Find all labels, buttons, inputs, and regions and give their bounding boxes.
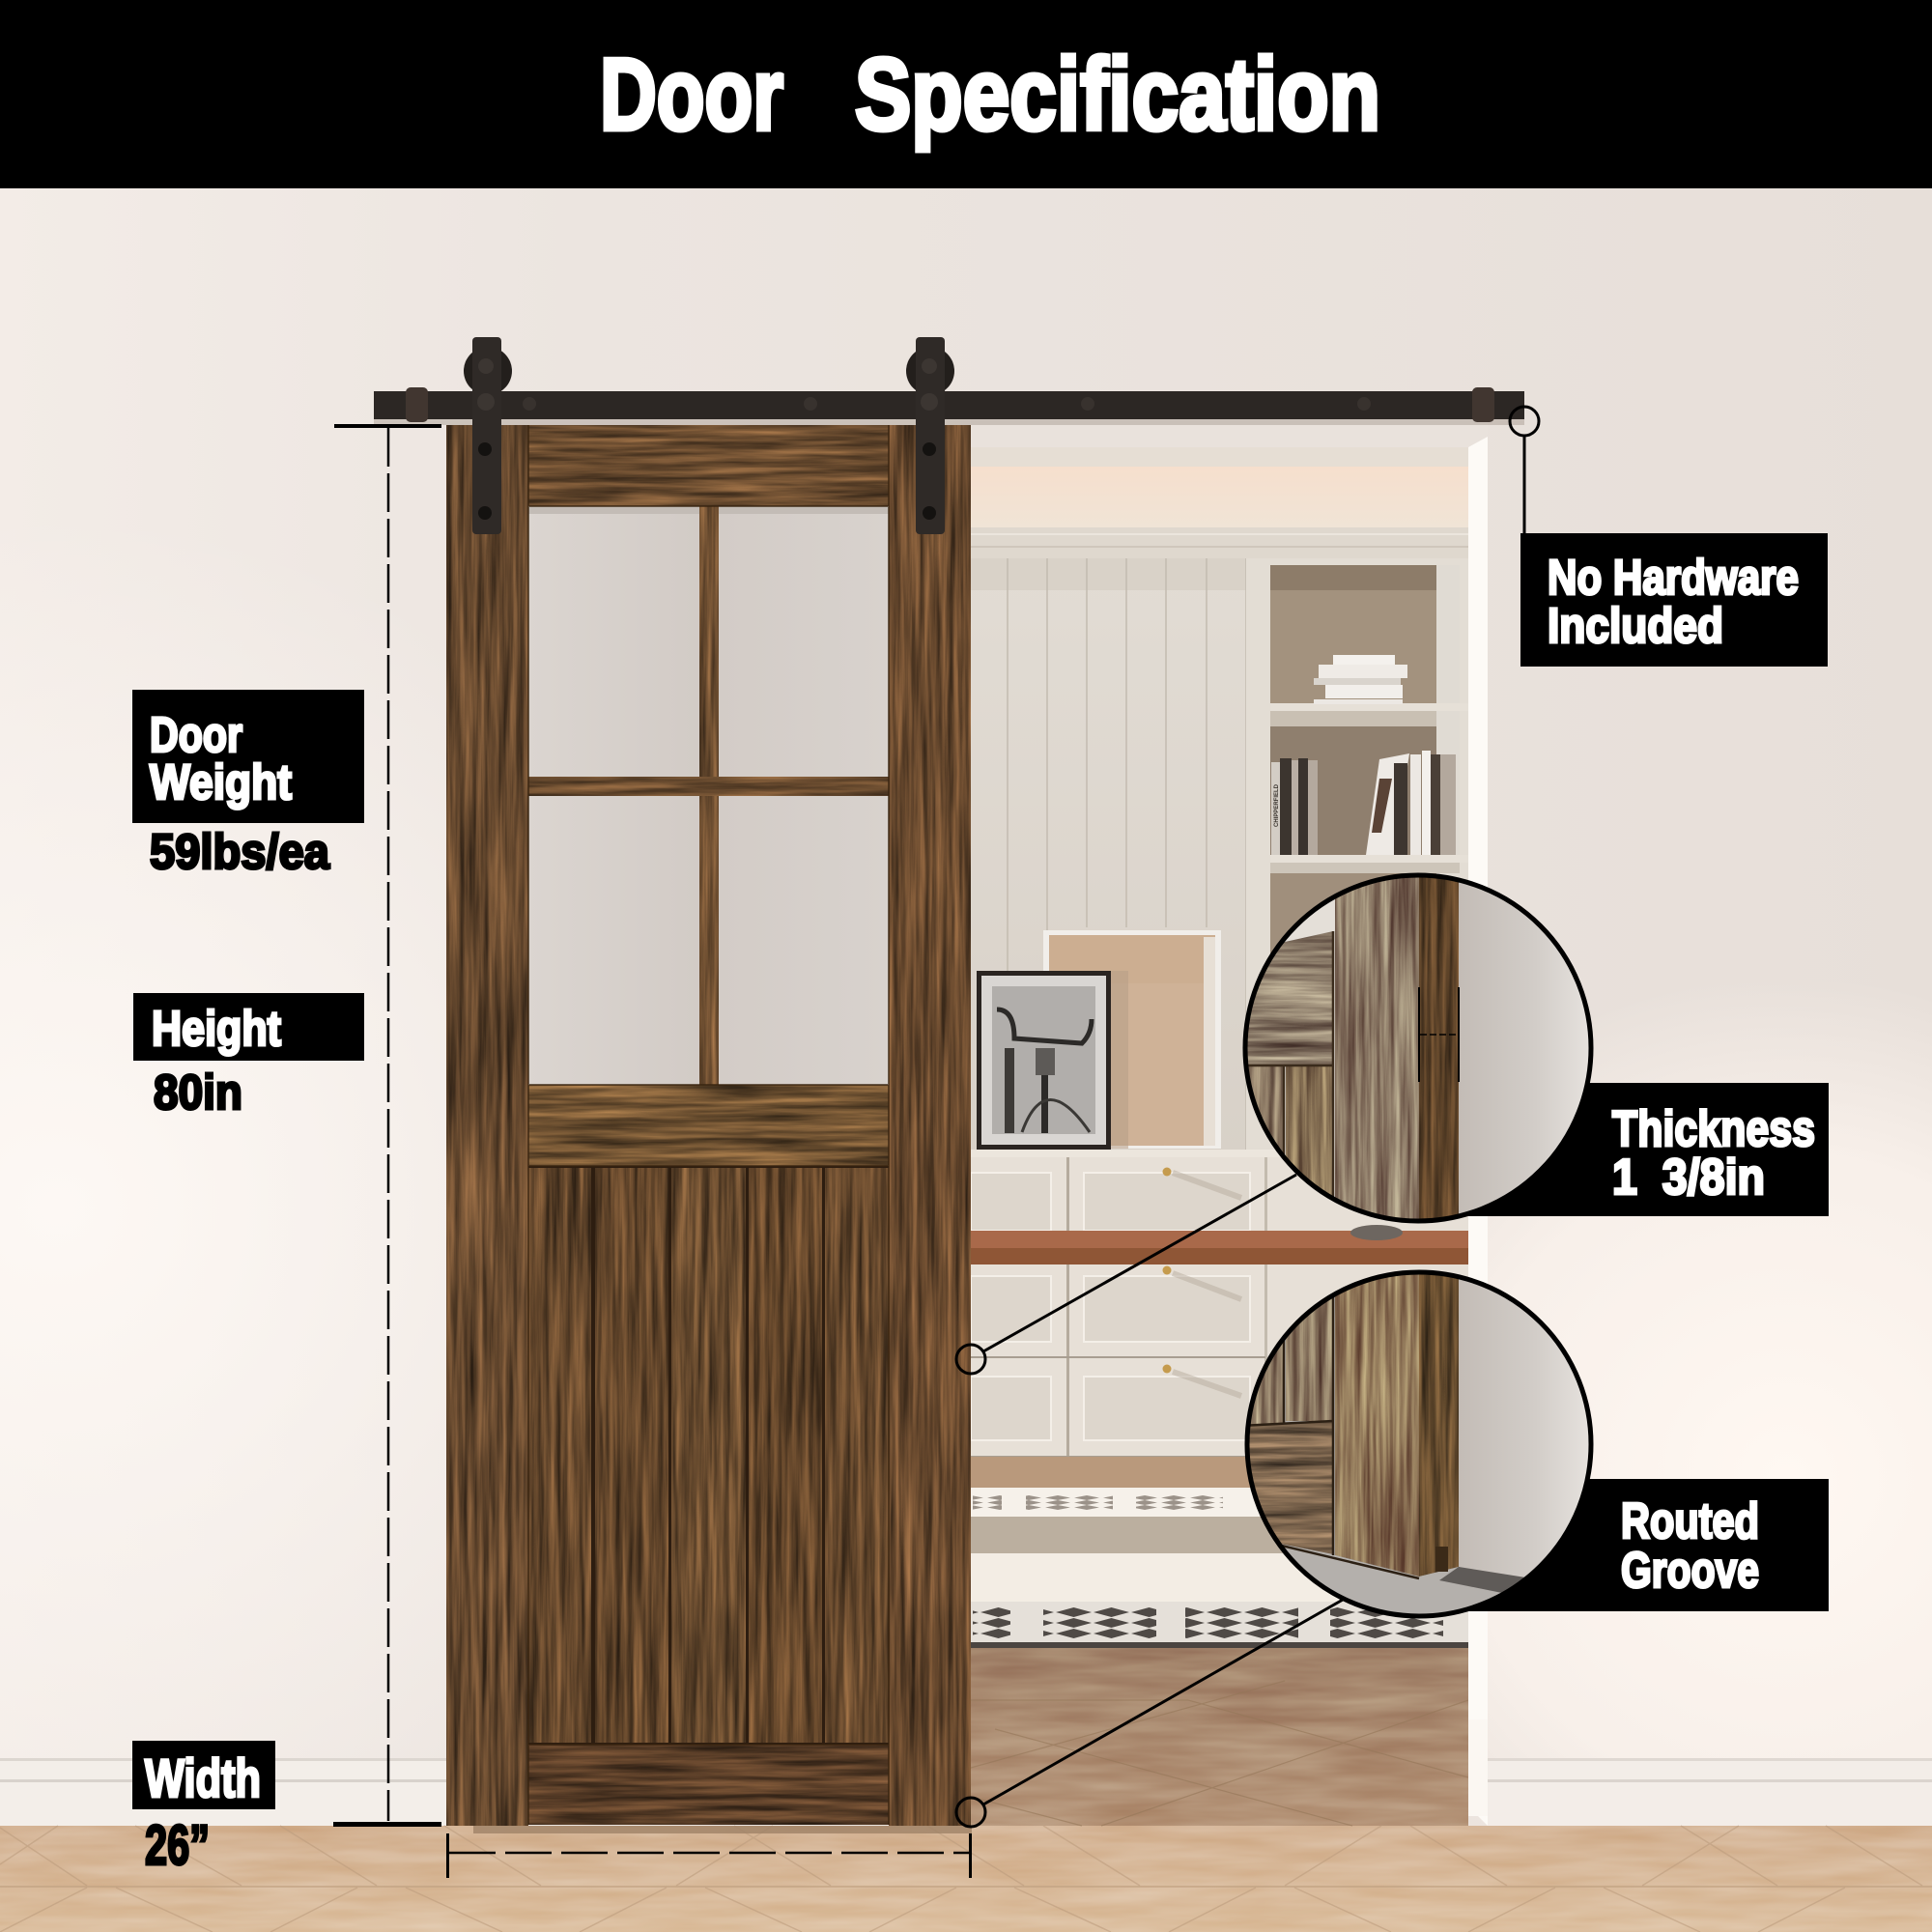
header bar	[0, 0, 1932, 188]
thickness marks	[1418, 987, 1460, 1082]
label: routed groove: Routed	[1621, 1493, 1759, 1549]
left stile	[446, 425, 528, 1826]
label: door weight: Door	[150, 707, 242, 762]
barn door	[446, 425, 971, 1826]
vertical muntin	[699, 506, 719, 1086]
label: thickness: Thickness	[1612, 1101, 1815, 1157]
height dimension line	[333, 424, 441, 1827]
value: height: 80in	[154, 1065, 242, 1120]
floor shadow under door	[473, 1826, 972, 1833]
detail circle: thickness	[1241, 869, 1599, 1231]
bookcase	[1246, 558, 1468, 1162]
door end	[1419, 869, 1459, 1227]
lower plank panels	[528, 1166, 889, 1745]
label: no hardware included: No Hardware	[1548, 550, 1799, 605]
rail face	[1241, 931, 1333, 1065]
stile face	[1335, 869, 1419, 1227]
detail circle: routed groove	[1241, 1265, 1599, 1623]
cabinet ledge	[971, 1150, 1468, 1159]
lower rail	[1250, 1422, 1332, 1554]
bottom rail	[528, 1745, 889, 1825]
left door hanger	[464, 337, 512, 534]
label: no hardware included: Included	[1548, 598, 1723, 653]
label: routed groove: Groove	[1621, 1543, 1759, 1599]
title: Specification	[855, 38, 1380, 152]
label: no hardware included	[1520, 533, 1828, 667]
upright books	[1271, 751, 1456, 855]
track spacer bolts	[523, 397, 1371, 411]
abstract art frame	[1043, 930, 1221, 1149]
rear floor and rug	[971, 1457, 1468, 1826]
upright books: CHIPPERFIELD	[1274, 783, 1280, 827]
middle rail	[528, 1085, 889, 1166]
label: door weight: Weight	[150, 754, 292, 810]
value: width: 26”	[145, 1814, 210, 1877]
doorway casing	[1468, 437, 1488, 1826]
opening header band	[971, 419, 1488, 447]
door end	[1419, 1265, 1459, 1577]
hardware track	[374, 387, 1524, 425]
label: height	[133, 993, 364, 1061]
label: thickness	[1449, 1083, 1829, 1216]
value: door weight: 59lbs/ea	[150, 824, 330, 879]
stacked books	[1314, 655, 1407, 704]
top rail	[528, 425, 889, 506]
bicycle photo frame	[977, 971, 1111, 1150]
left stop	[406, 387, 428, 422]
horizontal muntin	[528, 777, 889, 796]
stile face	[1335, 1265, 1419, 1577]
leader: no hardware	[1510, 407, 1539, 533]
right stile	[889, 425, 971, 1826]
wooden countertop	[971, 1225, 1468, 1264]
leader: routed groove	[956, 1600, 1343, 1827]
skirting boards	[0, 1758, 1932, 1826]
front floor	[0, 1826, 1932, 1932]
upper panels	[1250, 1343, 1283, 1424]
crown moulding	[971, 527, 1468, 558]
width dimension line	[446, 1833, 972, 1878]
room seen through the doorway	[971, 419, 1488, 1826]
leader: thickness	[956, 1175, 1296, 1374]
floor shadow	[1439, 1567, 1524, 1593]
routed groove notch	[1435, 1547, 1448, 1572]
title	[600, 38, 1380, 152]
title: Door	[600, 38, 783, 152]
label: thickness: 1 3/8in	[1612, 1150, 1765, 1206]
label: routed groove	[1449, 1479, 1829, 1611]
wall beside door	[1459, 883, 1563, 1213]
label: height: Height	[152, 1001, 281, 1056]
right stop	[1472, 387, 1494, 422]
drawer cabinets	[971, 1157, 1468, 1464]
wall beside door	[1459, 1279, 1588, 1577]
cove light	[971, 467, 1468, 527]
label: width: Width	[145, 1747, 261, 1808]
glass panes	[528, 506, 889, 1086]
label: door weight	[132, 690, 364, 823]
right door hanger	[906, 337, 954, 534]
lower panels	[1248, 1066, 1283, 1151]
panelled wall	[971, 558, 1261, 1157]
